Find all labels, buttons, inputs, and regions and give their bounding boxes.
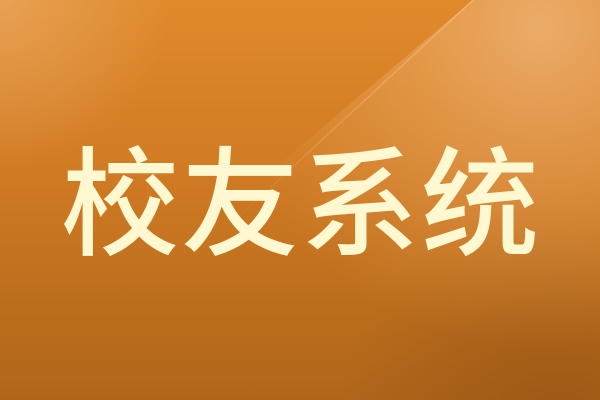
title: 校友系统: [61, 140, 541, 272]
